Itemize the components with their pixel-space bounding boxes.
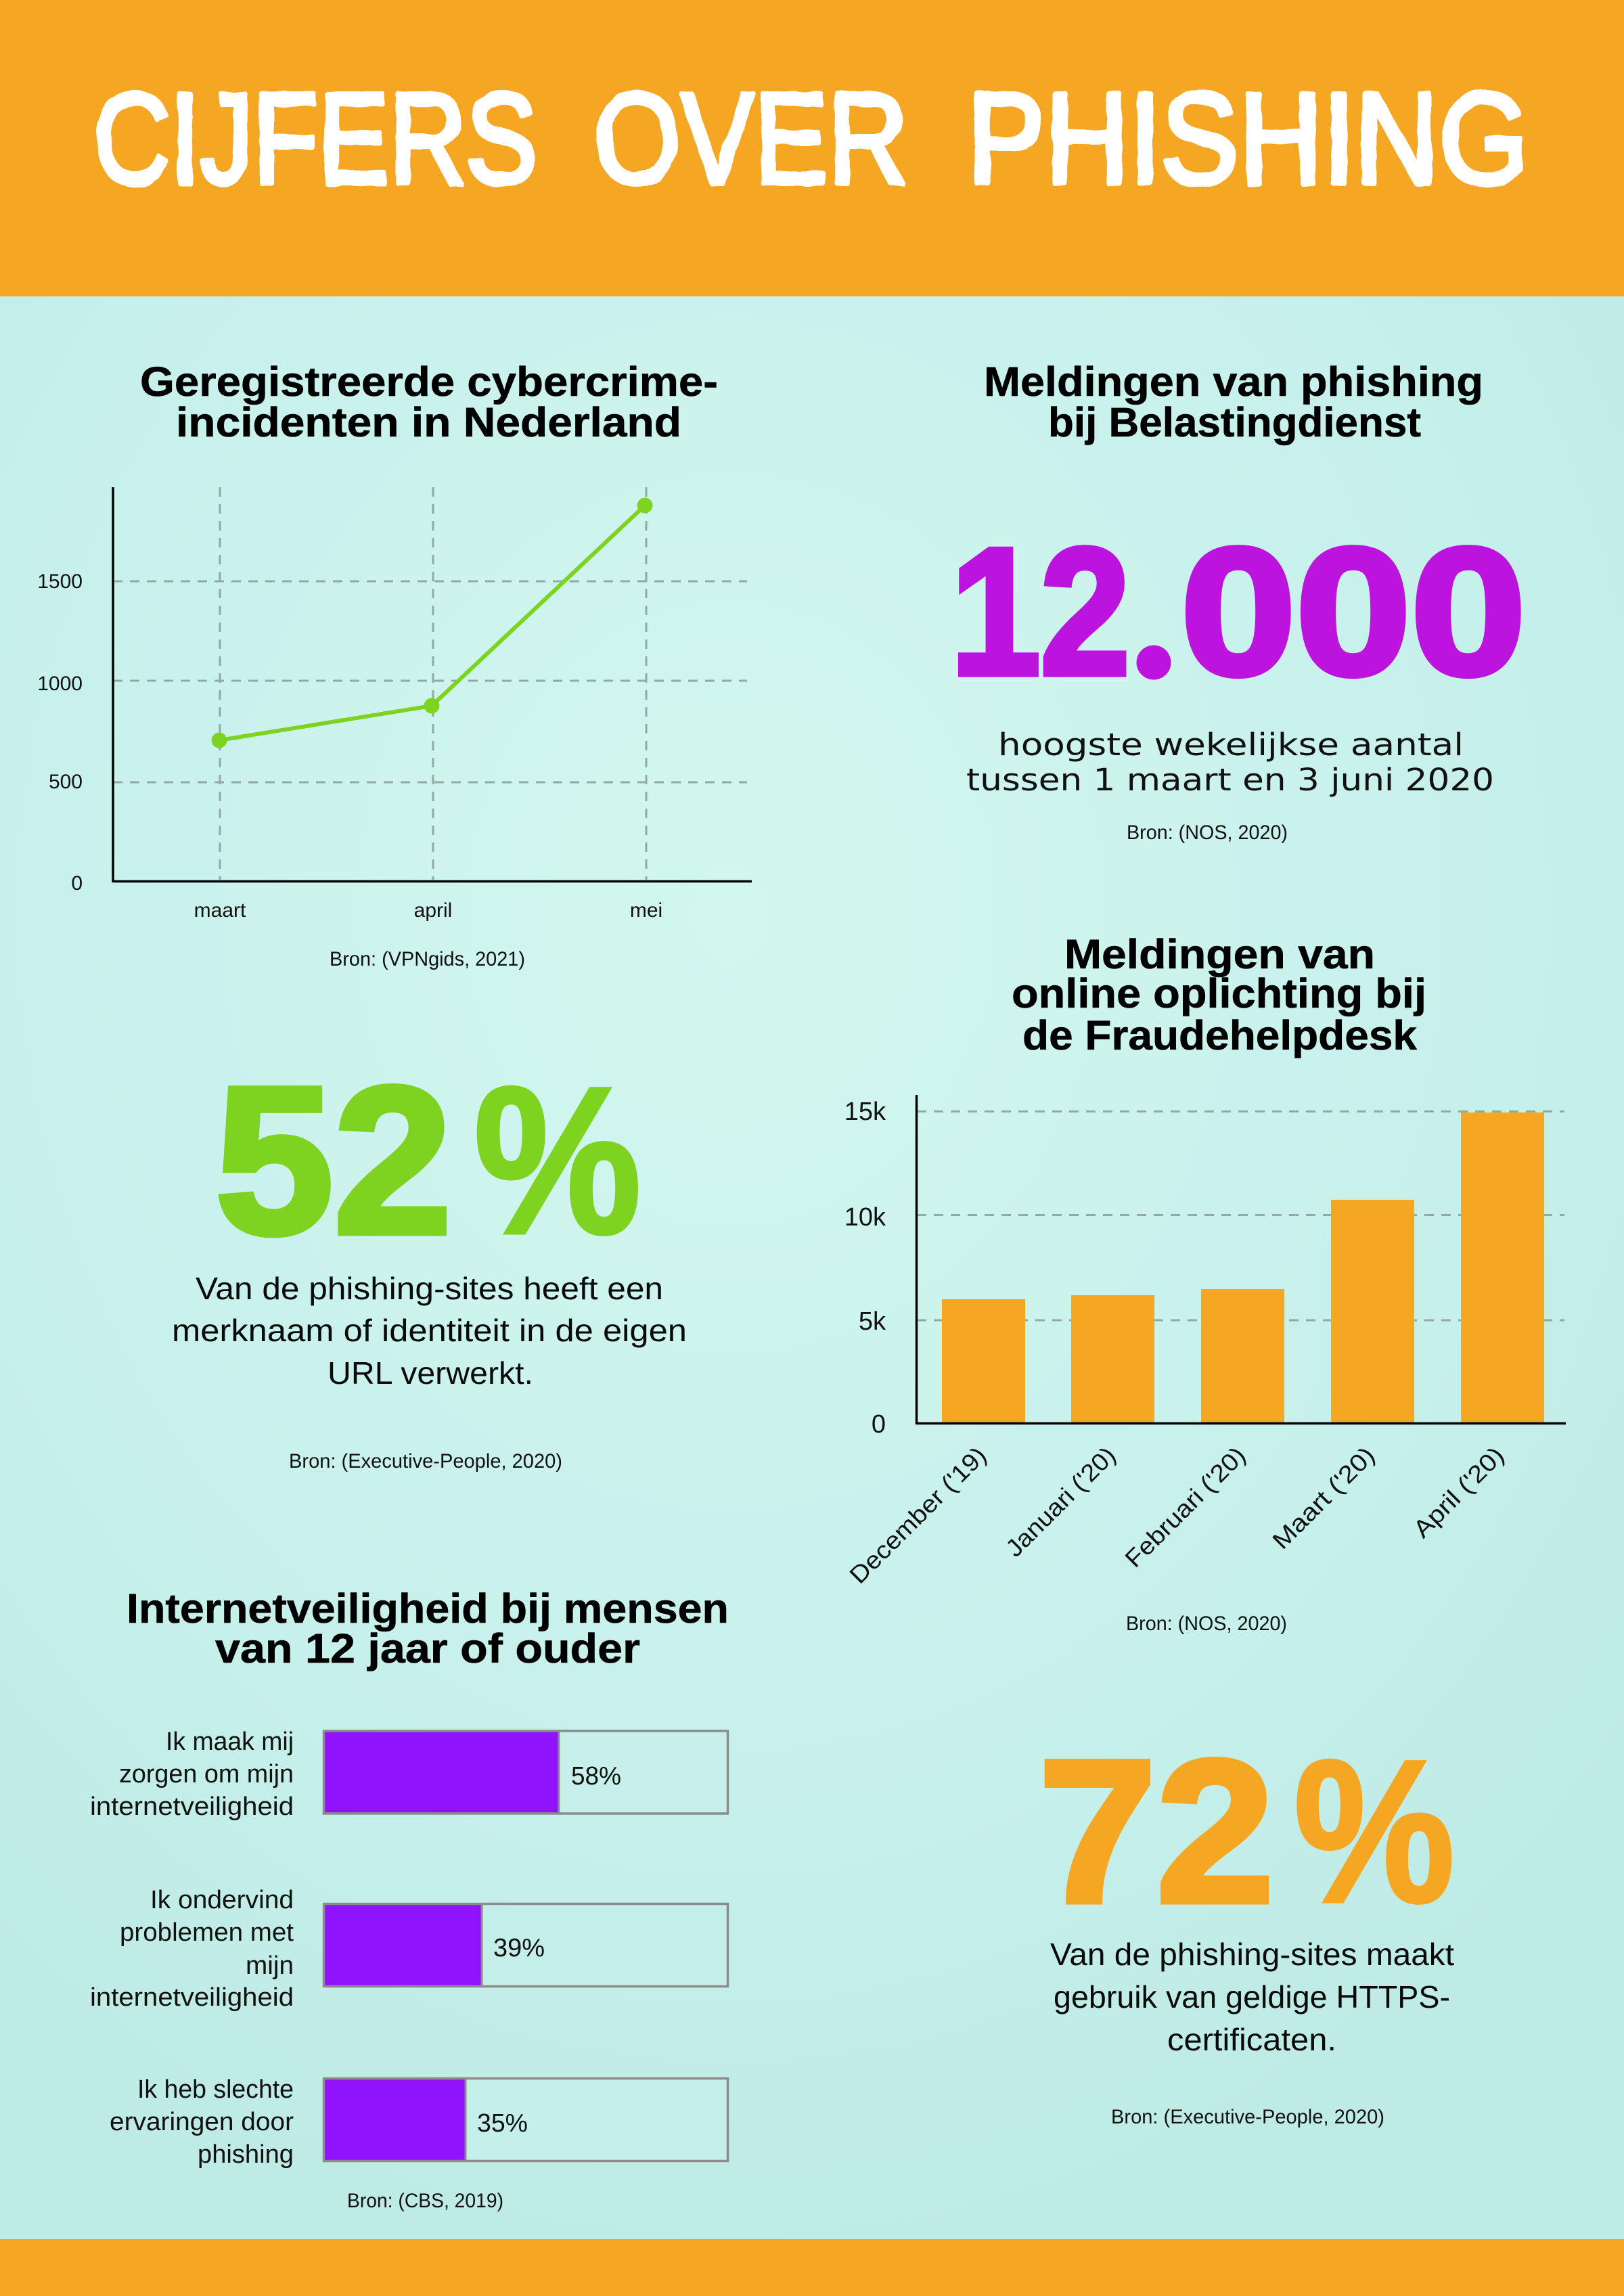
source: VPNgids: Bron: (VPNgids, 2021) xyxy=(330,948,525,970)
heading: Fraudehelpdesk xyxy=(1012,931,1426,1058)
bar chart: 15k xyxy=(844,1098,886,1126)
heading: cybercrime: incidenten in Nederland xyxy=(176,399,681,445)
title xyxy=(93,66,1529,211)
big number: 72%: 72 xyxy=(1039,1717,1274,1945)
progress bar: problemen 39%: 39% xyxy=(493,1934,545,1962)
panel: 72 procent xyxy=(1039,1717,1455,2128)
footer banner xyxy=(0,2239,1624,2296)
panel: 52 procent xyxy=(172,1043,687,1472)
description: merknaam: merknaam of identiteit in de eigen xyxy=(172,1313,687,1348)
source: Executive-People: Bron: (Executive-People, 2020) xyxy=(289,1450,562,1472)
line chart: 500 xyxy=(49,771,83,793)
progress bar: problemen 39%: mijn xyxy=(246,1952,294,1980)
progress bar: problemen 39%: problemen met xyxy=(120,1918,294,1947)
line chart: maart xyxy=(194,899,246,922)
heading: cybercrime: Geregistreerde cybercrime- xyxy=(140,359,718,405)
description: merknaam: Van de phishing-sites heeft een xyxy=(196,1271,663,1306)
panel: meldingen Belastingdienst xyxy=(951,359,1526,844)
bar chart: Februari ('20) xyxy=(1119,1441,1251,1573)
heading: Fraudehelpdesk: online oplichting bij xyxy=(1012,970,1426,1016)
progress bar: slechte ervaringen 35%: phishing xyxy=(198,2140,294,2169)
source: NOS: Bron: (NOS, 2020) xyxy=(1127,821,1288,844)
progress bar: zorgen 58%: internetveiligheid xyxy=(90,1793,294,1821)
description: HTTPS: gebruik van geldige HTTPS- xyxy=(1054,1979,1450,2014)
line chart: mei xyxy=(630,899,662,922)
title: OVER xyxy=(594,66,908,211)
bar chart: April ('20) xyxy=(1407,1441,1510,1543)
bar chart: 10k xyxy=(844,1203,886,1232)
big number: 12.000: 000 xyxy=(1181,510,1526,713)
progress bar: problemen 39% xyxy=(90,1886,728,2012)
line chart xyxy=(37,487,752,922)
heading: cybercrime xyxy=(140,359,718,445)
progress bar: zorgen 58%: zorgen om mijn xyxy=(119,1760,294,1788)
heading: internetveiligheid xyxy=(127,1585,729,1671)
panel: Fraudehelpdesk xyxy=(844,931,1566,1635)
progress bar: problemen 39%: Ik ondervind xyxy=(150,1886,294,1914)
big number: 72%: % xyxy=(1294,1717,1455,1945)
line chart: 1000 xyxy=(37,673,83,695)
description: hoogste aantal: tussen 1 maart en 3 juni 2020 xyxy=(966,762,1494,798)
heading: Fraudehelpdesk: Meldingen van xyxy=(1064,931,1375,977)
big number: 52%: 52 xyxy=(215,1043,452,1278)
progress bar: slechte ervaringen 35%: ervaringen door xyxy=(110,2108,294,2136)
big number: 52%: % xyxy=(474,1043,641,1278)
progress bar: slechte ervaringen 35% xyxy=(110,2075,728,2169)
heading: internetveiligheid: van 12 jaar of ouder xyxy=(215,1625,640,1671)
bar chart: 0 xyxy=(872,1410,886,1439)
heading: internetveiligheid: Internetveiligheid bij mensen xyxy=(127,1585,729,1631)
title: PHISHING xyxy=(968,66,1529,211)
big number: 72% xyxy=(1039,1717,1455,1945)
source: NOS fraudehelpdesk: Bron: (NOS, 2020) xyxy=(1126,1613,1287,1635)
heading: Belastingdienst xyxy=(984,359,1483,445)
bar chart: 5k xyxy=(859,1307,886,1336)
bar chart: December ('19) xyxy=(844,1441,992,1589)
bar chart xyxy=(844,1095,1566,1589)
big number: 52% xyxy=(215,1043,641,1278)
description: merknaam xyxy=(172,1271,687,1391)
progress bar: zorgen 58%: Ik maak mij xyxy=(166,1728,294,1756)
description: hoogste aantal: hoogste wekelijkse aantal xyxy=(998,727,1464,763)
heading: Belastingdienst: bij Belastingdienst xyxy=(1048,399,1421,445)
title: CIJFERS xyxy=(93,66,537,211)
progress bar: zorgen 58%: 58% xyxy=(571,1762,621,1791)
description: HTTPS: Van de phishing-sites maakt xyxy=(1050,1937,1454,1972)
bar chart: Januari ('20) xyxy=(1000,1441,1121,1562)
source: Executive-People 72: Bron: (Executive-People, 2020) xyxy=(1111,2106,1384,2128)
bar chart: Maart ('20) xyxy=(1267,1441,1380,1554)
description: HTTPS: certificaten. xyxy=(1167,2022,1336,2057)
line chart: 0 xyxy=(71,872,83,895)
progress bar: zorgen 58% xyxy=(90,1728,728,1821)
line chart: 1500 xyxy=(37,570,83,593)
source: CBS: Bron: (CBS, 2019) xyxy=(347,2190,503,2212)
big number: 12.000: 12 xyxy=(951,510,1130,713)
description: hoogste aantal xyxy=(966,727,1494,798)
progress bar: problemen 39%: internetveiligheid xyxy=(90,1983,294,2012)
description: merknaam: URL verwerkt. xyxy=(328,1355,533,1391)
big number: 12.000: . xyxy=(1144,637,1164,683)
line chart: april xyxy=(414,899,452,922)
header banner xyxy=(0,0,1624,296)
heading: Belastingdienst: Meldingen van phishing xyxy=(984,359,1483,405)
big number: 12.000 xyxy=(951,510,1526,713)
progress bar: slechte ervaringen 35%: Ik heb slechte xyxy=(137,2075,294,2104)
progress bar: slechte ervaringen 35%: 35% xyxy=(477,2109,528,2138)
description: HTTPS xyxy=(1050,1937,1454,2057)
panel: geregistreerde cybercrime-incidenten xyxy=(37,359,752,970)
panel: internetveiligheid xyxy=(90,1585,729,2212)
heading: Fraudehelpdesk: de Fraudehelpdesk xyxy=(1022,1012,1417,1058)
